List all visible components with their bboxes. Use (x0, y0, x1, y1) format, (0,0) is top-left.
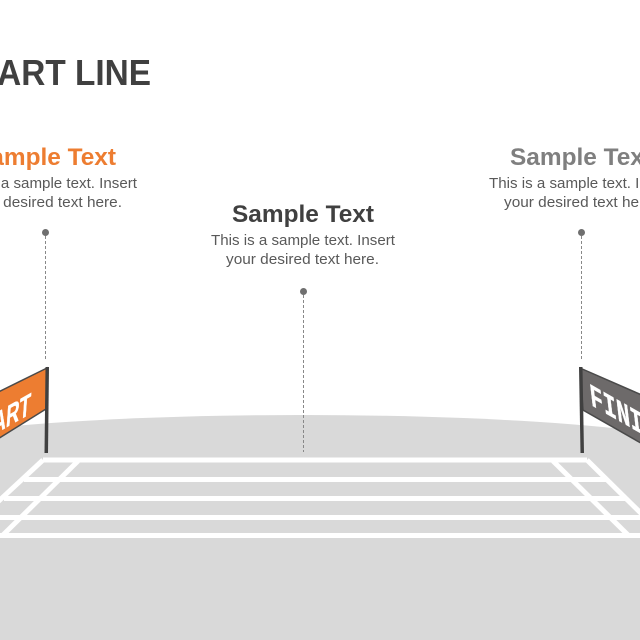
finish text block (489, 144, 640, 211)
finish flag (579, 367, 640, 461)
middle connector (300, 288, 307, 452)
start text block (0, 144, 138, 211)
middle text block: your desired text here. (226, 251, 379, 268)
running track (0, 460, 640, 537)
ground (0, 415, 640, 640)
middle text block (211, 201, 396, 268)
start connector (42, 229, 49, 360)
middle text block: Sample Text (232, 201, 374, 228)
finish connector (578, 229, 585, 360)
middle text block: This is a sample text. Insert (211, 232, 396, 249)
